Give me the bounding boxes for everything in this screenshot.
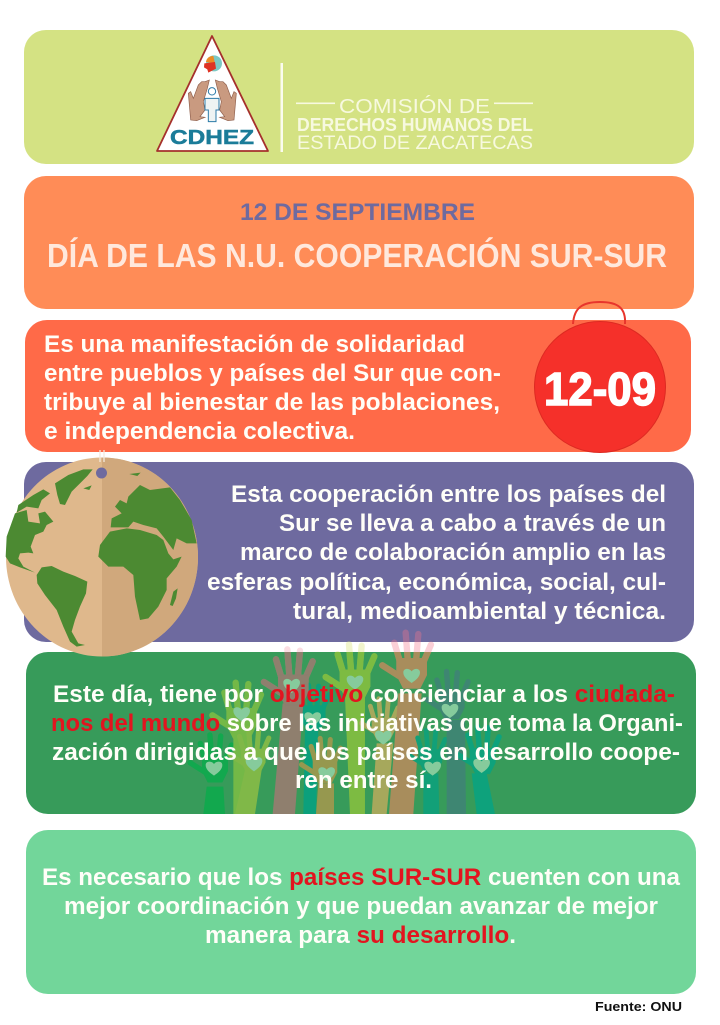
logo: CDHEZ triangle [157,36,268,151]
panel: cooperation [24,462,694,642]
organization name: DERECHOS HUMANOS DEL [297,115,533,135]
text: objective: Este día, tiene por objetivo concienciar a los ciudada- [53,681,675,708]
text: definition: Es una manifestación de solidaridad [44,331,465,358]
text: cooperation: esferas política, económica, social, cul- [207,569,666,596]
text: objective: nos del mundo sobre las iniciativas que toma la Organi- [51,710,683,737]
organization name [296,95,533,154]
icon: ornament ball 12-09: 12-09 [544,363,656,415]
text: cooperation [207,481,666,625]
text: definition [44,331,501,445]
organization name: ESTADO DE ZACATECAS [297,133,533,154]
text: cooperation: tural, medioambiental y técnica. [293,598,666,625]
text: cooperation: marco de colaboración amplio en las [240,539,666,566]
panel: header with logo [24,30,694,164]
illustration: faint fingertips above panel [264,633,431,705]
text: conclusion: manera para su desarrollo. [205,922,516,949]
text: conclusion: Es necesario que los países SUR-SUR cuenten con una [42,864,681,891]
text: objective: ren entre sí. [295,767,432,794]
icon: globe [6,450,198,656]
icon: ornament ball 12-09 [534,302,666,452]
date heading: 12 DE SEPTIEMBRE [240,199,475,226]
organization name: COMISIÓN DE [339,95,490,118]
text: conclusion [42,864,681,949]
main title: DÍA DE LAS N.U. COOPERACIÓN SUR-SUR [47,237,667,274]
panel: conclusion [26,830,696,994]
text: objective [51,681,683,794]
source note: Fuente: ONU [595,999,682,1014]
illustration: raised hands [190,633,499,814]
text: definition: e independencia colectiva. [44,418,355,445]
text: cooperation: Sur se lleva a cabo a través de un [279,510,666,537]
panel: definition [25,302,691,452]
text: conclusion: mejor coordinación y que puedan avanzar de mejor [64,893,658,920]
logo wordmark: CDHEZ [170,127,254,149]
text: objective: zación dirigidas a que los países en desarrollo coope- [52,739,680,766]
text: cooperation: Esta cooperación entre los países del [231,481,666,508]
panel: title [24,176,694,309]
text: definition: tribuye al bienestar de las poblaciones, [44,389,500,416]
text: definition: entre pueblos y países del Sur que con- [44,360,501,387]
panel: objective with hands [26,633,696,814]
